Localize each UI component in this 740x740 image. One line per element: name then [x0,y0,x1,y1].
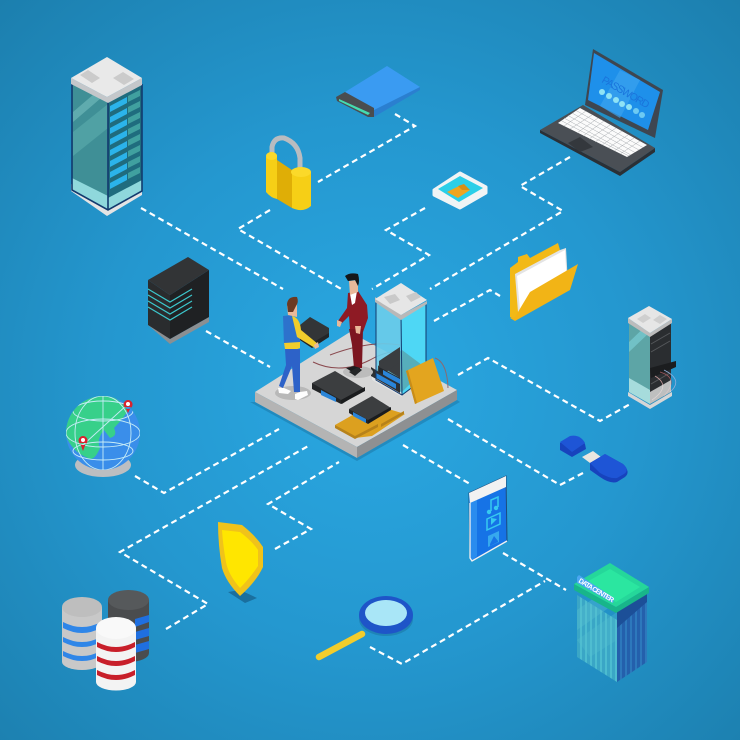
password label: PASSWORD [600,74,652,111]
icon: globe [64,393,140,477]
person: man in blue carrying server [275,297,329,400]
icon: blue book [336,66,420,117]
icon: laptop with password screen [540,49,663,176]
icon: smartphone with media apps [469,476,507,561]
glass server cabinet [371,283,427,397]
icon: USB flash drive [560,436,628,482]
rack units [378,351,400,378]
icon: padlock [266,138,311,210]
icon: memory chip card [434,173,486,208]
data center sign: DATA CENTER [577,578,615,604]
icon: dark tower server [148,257,209,344]
icon: tall server rack [71,57,142,216]
person: man in red suit [337,273,373,378]
icon: data center building [574,563,649,682]
icon: folder [510,243,578,321]
server unit on mat [349,396,391,424]
icon: magnifying glass [319,596,413,657]
cables on platform [313,344,420,368]
central platform [250,273,460,461]
server unit on floor [312,371,365,404]
yellow panel and cable [406,358,448,404]
icon: shield [218,522,263,603]
dashed connector lines [120,114,632,664]
icon: small server rack [628,306,676,409]
yellow mats [335,404,405,439]
icon: database cylinders [62,590,149,690]
